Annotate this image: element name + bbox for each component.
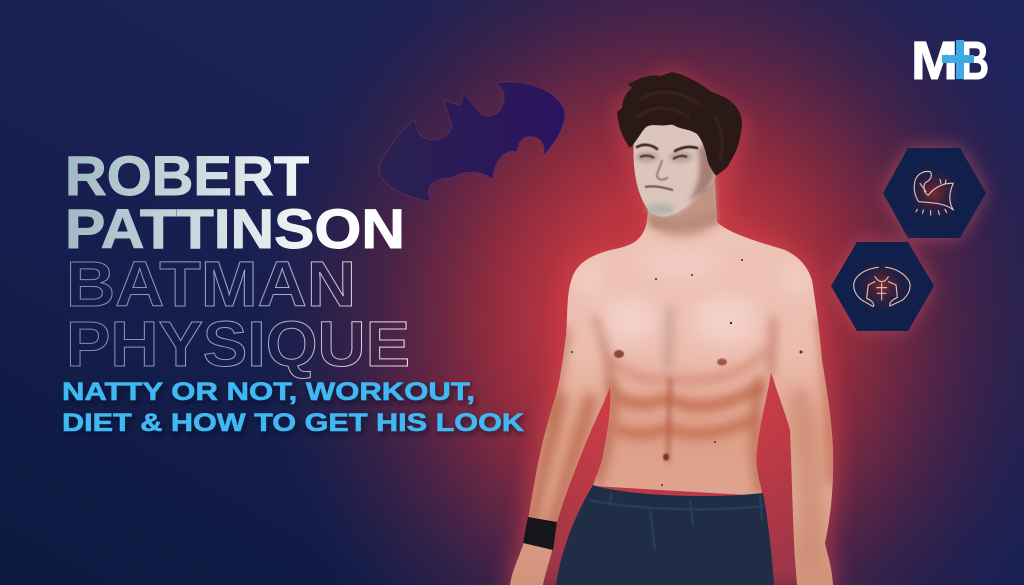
batman logo — [379, 82, 565, 202]
logo: M+B: B — [961, 31, 989, 91]
face shading — [636, 140, 716, 215]
figure glow — [510, 74, 833, 585]
hair — [617, 72, 742, 176]
title: Robert Pattinson — [65, 144, 405, 260]
title: Robert Pattinson: ROBERT — [65, 144, 309, 207]
torso and arms — [510, 170, 833, 585]
logo: M+B: M — [911, 31, 958, 91]
subtitle: DIET & HOW TO GET HIS LOOK — [62, 409, 524, 437]
figure: shirtless man — [510, 72, 833, 585]
title: Robert Pattinson: PATTINSON — [65, 197, 405, 260]
title outline: Batman Physique — [66, 248, 410, 380]
title outline: Batman Physique: BATMAN — [66, 248, 356, 320]
chest highlights — [576, 255, 809, 346]
muscle shading — [530, 215, 832, 560]
hexagon icon: torso muscles — [831, 242, 934, 331]
title outline: Batman Physique: PHYSIQUE — [66, 308, 410, 380]
subtitle — [62, 378, 524, 437]
wrist cuff — [523, 517, 557, 550]
logo: M+B — [911, 31, 989, 91]
neck shadow — [650, 175, 718, 229]
head and face — [633, 122, 716, 217]
trousers — [556, 485, 774, 585]
subtitle: NATTY OR NOT, WORKOUT, — [62, 378, 475, 406]
nipples, navel and moles — [571, 259, 802, 486]
hexagon icon: flexed biceps — [883, 148, 986, 238]
